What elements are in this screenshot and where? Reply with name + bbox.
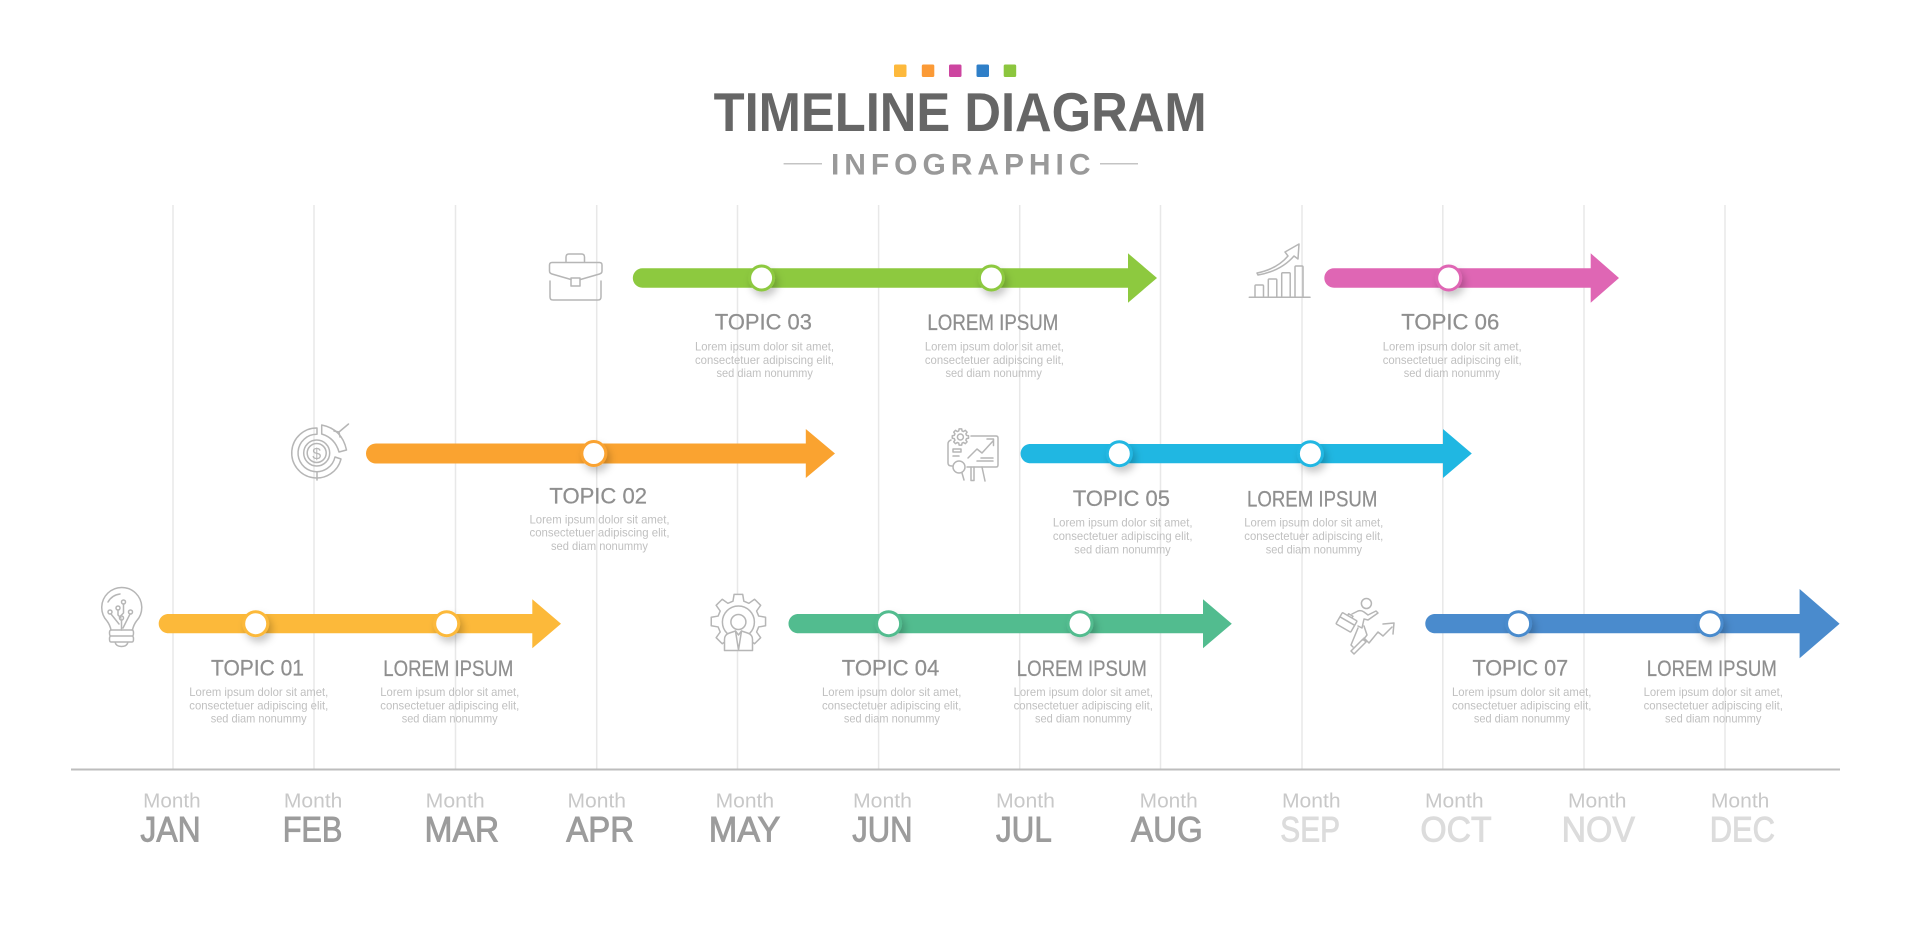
month: APR [566, 790, 634, 850]
month: FEB: FEB [283, 811, 342, 850]
arrow: teal [788, 599, 1232, 648]
month: OCT: OCT [1420, 811, 1492, 850]
heading: LOREM IPSUM [1247, 486, 1377, 512]
text block [1383, 340, 1522, 380]
icon: light bulb with circuits [102, 587, 142, 646]
month: MAR: MAR [424, 811, 499, 850]
month: MAY: MAY [709, 811, 780, 850]
marker [1435, 264, 1462, 292]
text block: Lorem ipsum dolor sit amet, [530, 512, 670, 526]
marker [875, 610, 902, 637]
arrow: green [633, 253, 1157, 303]
month: JUN: JUN [852, 811, 912, 850]
arrow: blue [1425, 589, 1840, 658]
month: DEC: Month [1711, 790, 1769, 812]
text block: consectetuer adipiscing elit, [925, 353, 1064, 367]
month: JUN [852, 790, 912, 850]
heading: TOPIC 02 [549, 483, 647, 508]
title: TIMELINE DIAGRAM [714, 82, 1207, 143]
heading: TOPIC 04 [842, 655, 939, 680]
heading: TOPIC 07 [1472, 655, 1568, 680]
panel: topic 06 [1249, 244, 1619, 380]
icon: running businessman [1336, 598, 1394, 654]
month: OCT [1420, 790, 1492, 850]
icon: target with dollar: $ [312, 446, 321, 463]
text block: Lorem ipsum dolor sit amet, [1244, 516, 1383, 530]
month: AUG [1131, 790, 1203, 850]
icon: gear with person [711, 594, 766, 650]
text block: sed diam nonummy [1665, 711, 1761, 725]
month: SEP [1280, 790, 1341, 850]
arrow: pink [1324, 253, 1619, 303]
text block [189, 685, 328, 725]
marker [580, 440, 607, 467]
month: JAN: Month [143, 790, 201, 812]
heading: LOREM IPSUM [383, 656, 513, 681]
month: APR: Month [568, 790, 626, 812]
month: AUG: AUG [1131, 811, 1203, 850]
marker [433, 610, 460, 637]
text block [695, 340, 834, 380]
month: JUN: Month [853, 790, 912, 812]
text block [925, 340, 1064, 380]
text block: sed diam nonummy [1074, 542, 1171, 556]
text block: consectetuer adipiscing elit, [1014, 698, 1153, 712]
marker [748, 264, 775, 292]
arrow: orange [366, 429, 835, 478]
marker [978, 264, 1005, 292]
marker [242, 610, 269, 637]
text block: consectetuer adipiscing elit, [189, 698, 328, 712]
text block [1014, 685, 1153, 725]
marker [1505, 610, 1532, 637]
month: DEC [1710, 790, 1775, 850]
text block: sed diam nonummy [1035, 711, 1131, 725]
icon: target with dollar [292, 424, 348, 480]
text block: Lorem ipsum dolor sit amet, [1053, 516, 1192, 530]
text block: sed diam nonummy [551, 539, 648, 553]
text block: consectetuer adipiscing elit, [380, 698, 519, 712]
arrow: cyan [1021, 429, 1472, 478]
month: NOV [1562, 790, 1636, 850]
text block [530, 512, 670, 553]
text block: sed diam nonummy [211, 711, 307, 725]
text block [1053, 516, 1192, 556]
panel: topic 05 [948, 429, 1472, 556]
month: MAR [424, 790, 499, 850]
month: AUG: Month [1140, 790, 1198, 812]
panel: topic 03 [550, 253, 1157, 380]
text block: sed diam nonummy [946, 366, 1042, 380]
month: JAN [140, 790, 201, 850]
marker [1696, 610, 1724, 637]
text block: Lorem ipsum dolor sit amet, [1452, 685, 1591, 699]
panel: topic 07 [1336, 589, 1840, 725]
month labels [140, 790, 1775, 850]
heading: TOPIC 03 [715, 309, 812, 334]
text block [1244, 516, 1383, 556]
text block: sed diam nonummy [1266, 542, 1362, 556]
marker [1297, 440, 1324, 467]
text block: Lorem ipsum dolor sit amet, [380, 685, 519, 699]
text block: consectetuer adipiscing elit, [1383, 353, 1522, 367]
axis line [71, 768, 1840, 770]
text block [380, 685, 519, 725]
text block: consectetuer adipiscing elit, [695, 353, 834, 367]
text block: Lorem ipsum dolor sit amet, [925, 340, 1064, 354]
text block: Lorem ipsum dolor sit amet, [1014, 685, 1153, 699]
text block: consectetuer adipiscing elit, [1053, 529, 1192, 543]
text block: sed diam nonummy [1474, 711, 1570, 725]
grid lines [173, 205, 1725, 769]
text block: Lorem ipsum dolor sit amet, [695, 340, 834, 354]
text block: consectetuer adipiscing elit, [1244, 529, 1383, 543]
marker [1066, 610, 1094, 637]
month: JUL [996, 790, 1055, 850]
month: FEB: Month [284, 790, 342, 812]
heading: TOPIC 06 [1401, 309, 1499, 334]
text block: Lorem ipsum dolor sit amet, [1383, 340, 1522, 354]
month: NOV: NOV [1562, 811, 1636, 850]
panel: topic 01 [102, 587, 561, 725]
text block: sed diam nonummy [716, 366, 813, 380]
subtitle: INFOGRAPHIC [831, 148, 1090, 181]
text block [822, 685, 961, 725]
text block: consectetuer adipiscing elit, [1644, 698, 1783, 712]
text block: Lorem ipsum dolor sit amet, [189, 685, 328, 699]
arrow: yellow [159, 599, 561, 648]
text block: sed diam nonummy [1404, 366, 1500, 380]
text block: Lorem ipsum dolor sit amet, [822, 685, 961, 699]
month: JAN: JAN [140, 811, 201, 850]
heading: TOPIC 05 [1073, 486, 1170, 511]
panel: topic 02 [292, 424, 835, 553]
month: MAY: Month [716, 790, 774, 812]
text block: sed diam nonummy [844, 711, 940, 725]
icon: presentation board [948, 429, 998, 481]
heading: LOREM IPSUM [1017, 656, 1147, 681]
month: FEB [283, 790, 342, 850]
text block: consectetuer adipiscing elit, [822, 698, 961, 712]
month: JUL: Month [996, 790, 1055, 812]
marker [1106, 440, 1133, 467]
month: SEP: Month [1282, 790, 1341, 812]
text block: consectetuer adipiscing elit, [530, 526, 670, 540]
text block [1452, 685, 1591, 725]
icon: briefcase [550, 254, 602, 300]
panel: topic 04 [711, 594, 1232, 725]
header [714, 64, 1207, 181]
month: JUL: JUL [996, 811, 1052, 850]
month: MAY [709, 790, 780, 850]
text block: Lorem ipsum dolor sit amet, [1644, 685, 1783, 699]
month: SEP: SEP [1280, 811, 1340, 850]
icon: growth chart [1249, 244, 1310, 297]
text block: consectetuer adipiscing elit, [1452, 698, 1591, 712]
heading: LOREM IPSUM [927, 310, 1058, 335]
month: MAR: Month [426, 790, 485, 812]
month: APR: APR [566, 811, 634, 850]
month: OCT: Month [1425, 790, 1484, 812]
colour dots [894, 64, 1016, 77]
month: DEC: DEC [1710, 811, 1775, 850]
heading: LOREM IPSUM [1647, 656, 1777, 681]
heading: TOPIC 01 [211, 655, 304, 680]
text block [1644, 685, 1783, 725]
month: NOV: Month [1568, 790, 1626, 812]
text block: sed diam nonummy [402, 711, 498, 725]
